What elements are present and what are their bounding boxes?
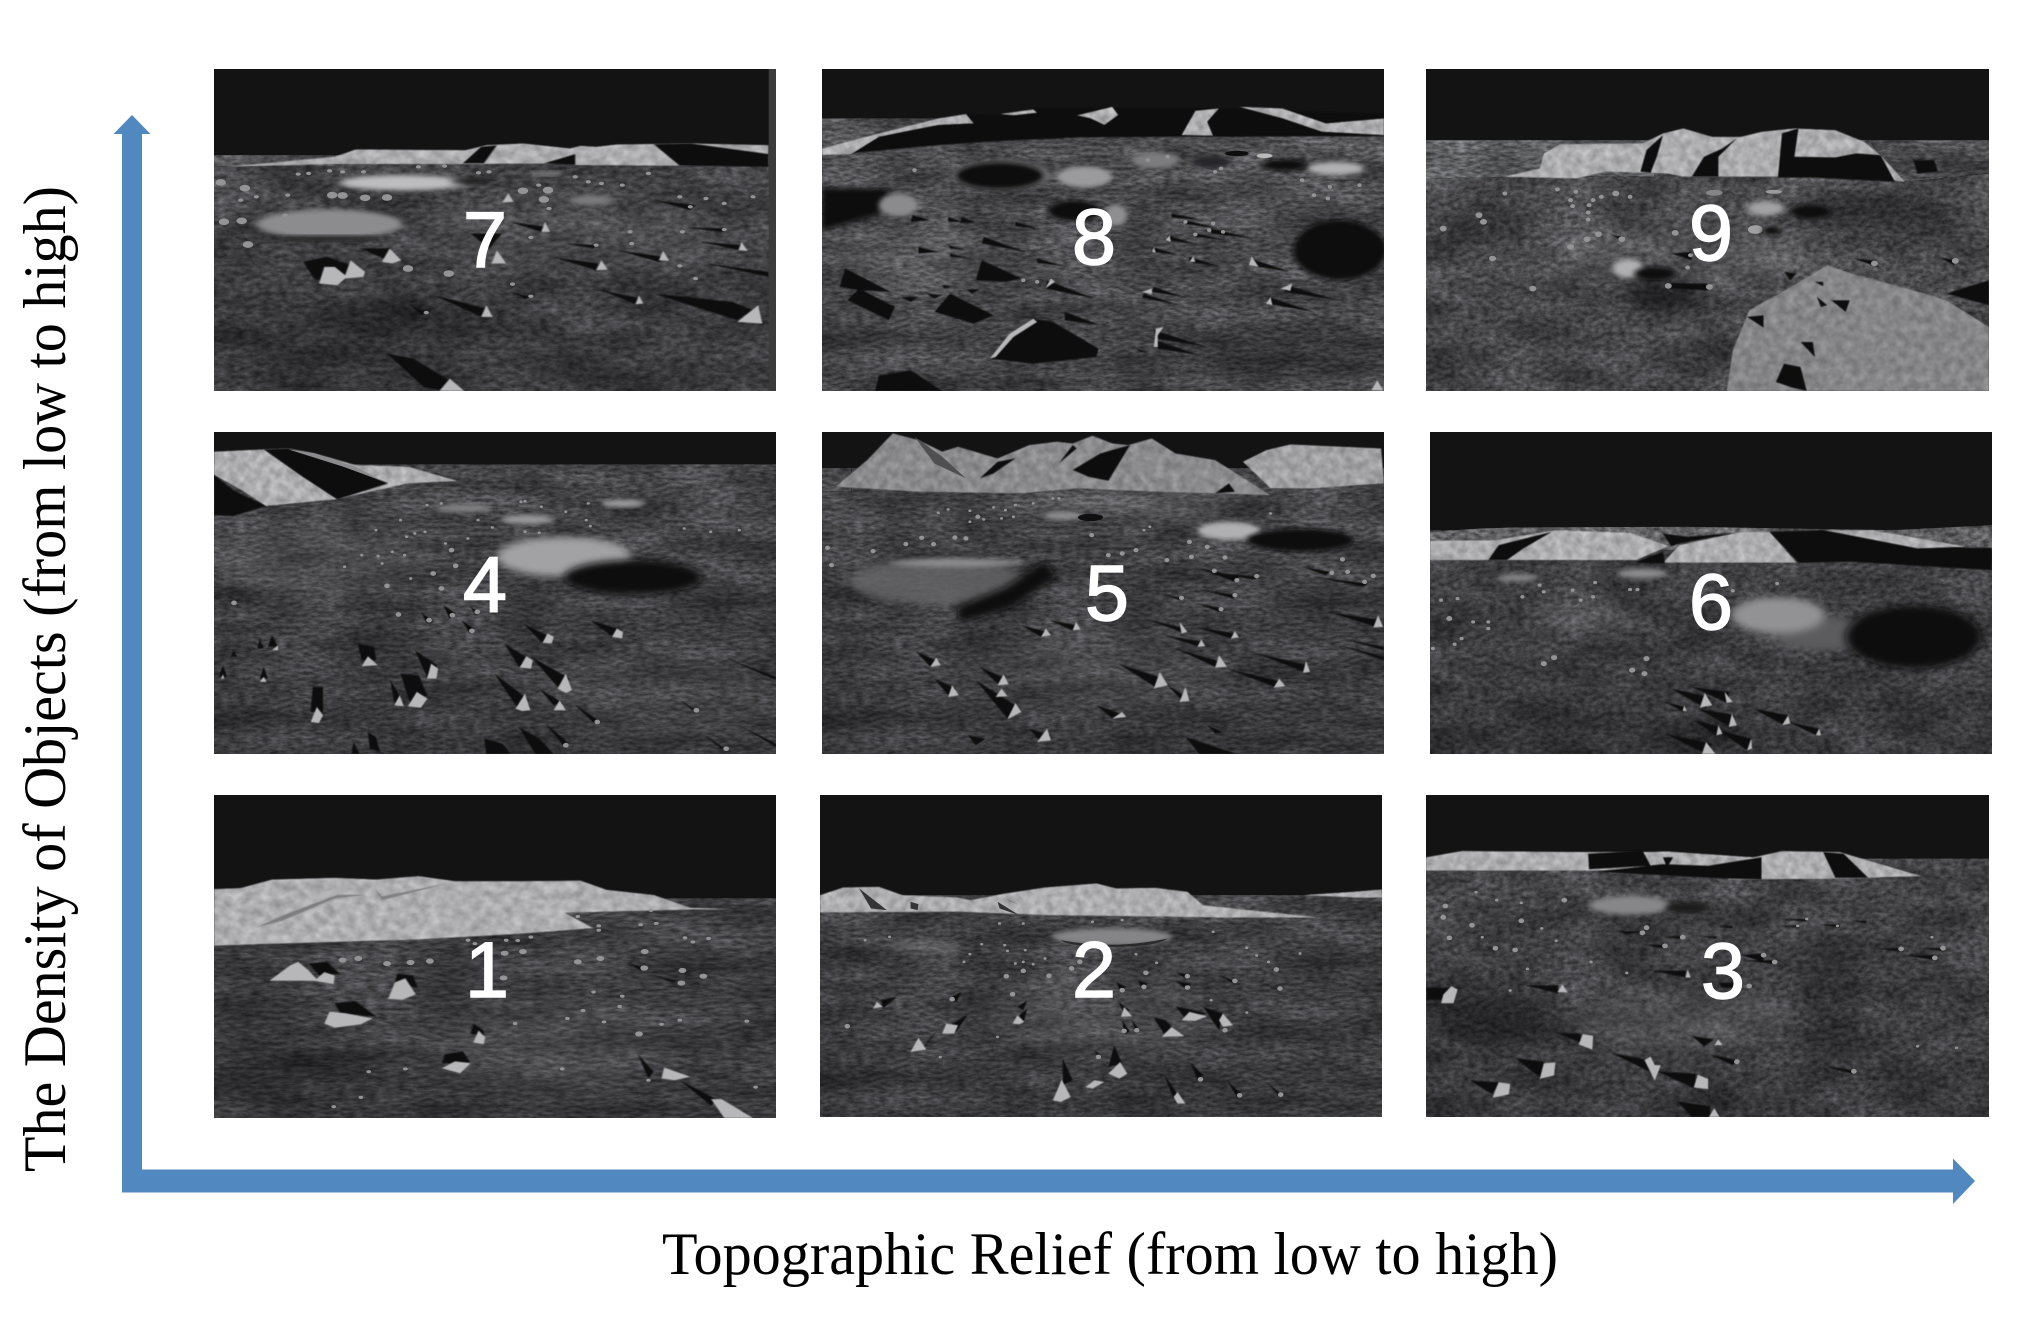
panel 1: low relief, low density — [199, 795, 776, 1118]
number 5: 5 — [1085, 548, 1129, 637]
scene 4 — [214, 432, 776, 754]
panel 8: medium relief, high density — [822, 69, 1393, 391]
panel 3: high relief, low density — [1421, 795, 1989, 1117]
panel 7: low relief, high density — [209, 69, 776, 391]
scene 8 — [822, 69, 1384, 391]
panel 4: low relief, medium density — [209, 432, 776, 754]
scene 6 — [1430, 432, 1992, 754]
arrow: horizontal axis — [122, 1158, 1975, 1204]
number 3: 3 — [1701, 926, 1745, 1015]
arrow: vertical axis — [114, 115, 150, 1192]
number 4: 4 — [463, 540, 507, 629]
label: y axis title: The Density of Objects (from low to high) — [12, 186, 78, 1172]
number 1: 1 — [465, 925, 509, 1014]
scene 2 — [820, 795, 1382, 1117]
number 8: 8 — [1072, 192, 1116, 281]
panel 5: medium relief, medium density — [822, 432, 1384, 754]
scene 3 — [1426, 795, 1989, 1117]
scene 9 — [1426, 69, 1989, 391]
panel 9: high relief, high density — [1426, 69, 1989, 391]
label: x axis title: Topographic Relief (from low to high) — [662, 1221, 1558, 1287]
scene 1 — [214, 795, 776, 1118]
number 2: 2 — [1072, 925, 1116, 1014]
number 9: 9 — [1689, 188, 1733, 277]
scene 5 — [822, 432, 1384, 754]
panel 6: high relief, medium density — [1430, 432, 1992, 764]
number 6: 6 — [1689, 557, 1733, 646]
number 7: 7 — [463, 195, 507, 284]
scene 7 — [214, 69, 776, 391]
panel 2: medium relief, low density — [820, 795, 1382, 1117]
